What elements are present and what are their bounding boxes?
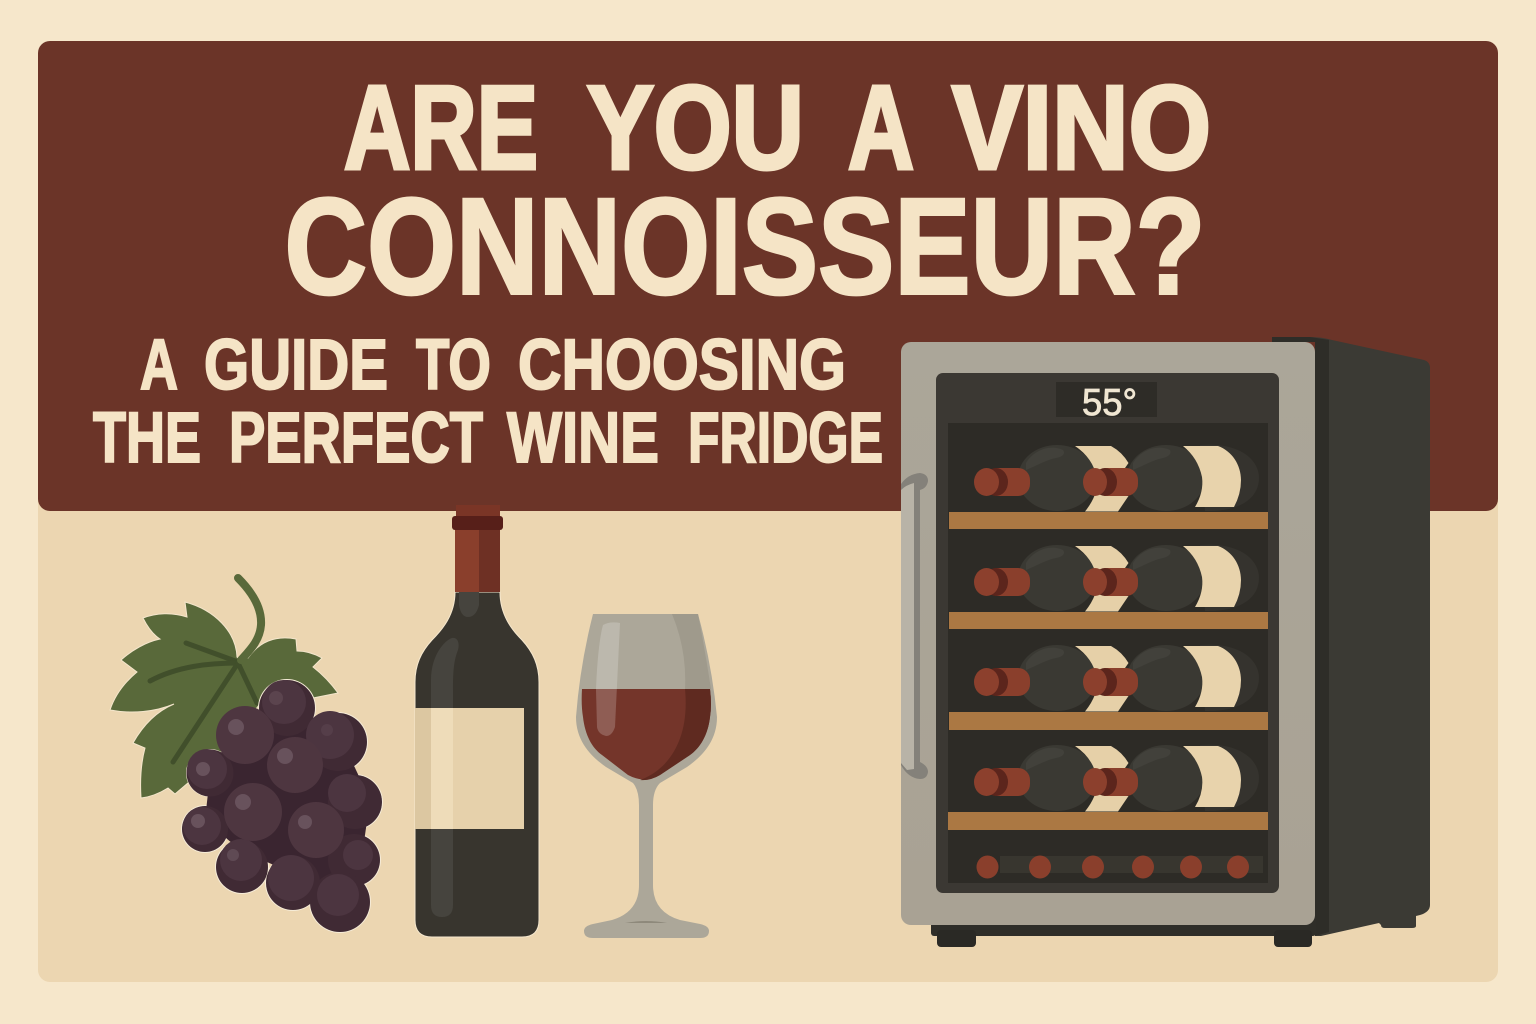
shelf row 1 bottles <box>974 445 1259 512</box>
title: CONNOISSEUR? <box>284 170 1206 324</box>
subtitle <box>93 326 883 478</box>
back grapes <box>182 680 382 932</box>
bottle label <box>415 708 524 829</box>
subtitle: FRIDGE <box>688 399 883 478</box>
glass highlight <box>431 638 459 917</box>
door window <box>936 373 1279 893</box>
temperature display <box>1056 382 1157 424</box>
icon: wine glass <box>576 614 717 938</box>
fridge door frame <box>901 342 1315 925</box>
fridge side strip <box>1272 337 1329 936</box>
title: YOU <box>587 62 804 194</box>
shelf row 2 bottles <box>974 545 1259 612</box>
title: ARE <box>344 62 538 194</box>
icon: wine bottle <box>415 505 539 937</box>
grape bunch <box>181 679 383 933</box>
interior <box>948 423 1268 883</box>
fridge base <box>931 915 1316 936</box>
title: VINO <box>952 62 1211 194</box>
icon: wine fridge <box>901 337 1430 947</box>
bunch interior <box>205 725 370 900</box>
title <box>284 62 1211 324</box>
subtitle: WINE <box>507 399 659 478</box>
lower panel <box>38 300 1498 982</box>
icon: grapes and vine leaf <box>110 578 383 933</box>
subtitle: GUIDE <box>204 326 388 405</box>
shelf row 4 bottles <box>974 745 1259 812</box>
grape leaf <box>110 602 338 798</box>
wooden shelves <box>948 512 1268 830</box>
subtitle: TO <box>416 326 491 405</box>
bottom bottle row <box>976 856 1263 878</box>
bottle cap <box>456 505 500 517</box>
subtitle: THE <box>93 399 201 478</box>
shelf row 3 bottles <box>974 645 1259 712</box>
leaf veins <box>150 643 257 762</box>
glass highlight <box>596 622 620 736</box>
fridge feet <box>937 930 1312 947</box>
bottle glass <box>415 592 539 937</box>
glass bowl and stem <box>576 614 717 938</box>
temperature display: 55° <box>1082 382 1137 424</box>
neck highlight <box>459 592 479 617</box>
bottle foil <box>455 530 479 592</box>
fridge side cabinet <box>1272 337 1430 936</box>
subtitle: A <box>140 326 178 405</box>
glass shaded side <box>672 614 711 689</box>
front grapes <box>216 706 344 858</box>
subtitle: CHOOSING <box>518 326 846 405</box>
glass base shadow <box>625 921 667 923</box>
bunch halo <box>181 679 383 933</box>
wine <box>582 689 711 780</box>
subtitle: PERFECT <box>229 399 483 478</box>
door handle <box>901 473 928 779</box>
title banner <box>38 41 1498 511</box>
grape stem <box>238 578 261 660</box>
wine shadow <box>640 689 711 780</box>
title: A <box>848 62 914 194</box>
grape highlights <box>191 691 333 861</box>
